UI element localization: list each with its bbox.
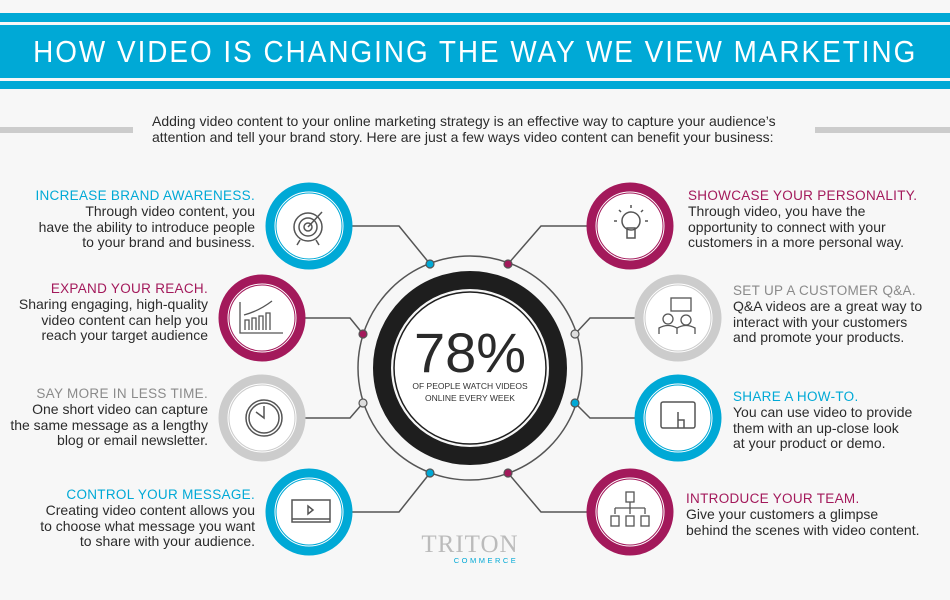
text: team: behind the scenes with video content. bbox=[686, 522, 920, 538]
text: control message: CONTROL YOUR MESSAGE. bbox=[66, 487, 255, 502]
text: increase brand awareness: have the ability to introduce people bbox=[39, 218, 255, 234]
text: showcase personality: SHOWCASE YOUR PERSONALITY. bbox=[688, 188, 917, 203]
text: how-to bbox=[733, 389, 912, 451]
logo: COMMERCE bbox=[454, 556, 518, 565]
text: team: Give your customers a glimpse bbox=[686, 506, 878, 522]
text: control message bbox=[40, 487, 255, 549]
text: increase brand awareness: Through video content, you bbox=[85, 203, 255, 219]
text: showcase personality: customers in a more personal way. bbox=[688, 234, 904, 250]
title banner bbox=[0, 25, 950, 78]
text: Q&A: interact with your customers bbox=[733, 314, 907, 330]
text: control message: to share with your audience. bbox=[80, 533, 255, 549]
text: expand reach: Sharing engaging, high-quality bbox=[19, 296, 208, 312]
text: how-to: SHARE A HOW-TO. bbox=[733, 389, 859, 404]
title banner: HOW VIDEO IS CHANGING THE WAY WE VIEW MARKETING bbox=[33, 34, 917, 69]
text: showcase personality: opportunity to connect with your bbox=[688, 218, 886, 234]
text: how-to: at your product or demo. bbox=[733, 435, 886, 451]
text: control message: to choose what message you want bbox=[40, 518, 255, 534]
text: expand reach: EXPAND YOUR REACH. bbox=[51, 281, 208, 296]
text: increase brand awareness: INCREASE BRAND AWARENESS. bbox=[35, 188, 255, 203]
text: expand reach bbox=[19, 281, 208, 343]
text: how-to: them with an up-close look bbox=[733, 420, 899, 436]
intro text: attention and tell your brand story. Here are just a few ways video content can benefit your business: bbox=[152, 129, 774, 145]
text: increase brand awareness: to your brand and business. bbox=[82, 234, 255, 250]
text: how-to: You can use video to provide bbox=[733, 404, 912, 420]
intro text: Adding video content to your online marketing strategy is an effective way to capture your audience’s bbox=[152, 113, 776, 129]
text: showcase personality bbox=[688, 188, 917, 250]
text: say more: One short video can capture bbox=[32, 401, 208, 417]
center stat: 78% bbox=[414, 321, 526, 384]
text: Q&A: SET UP A CUSTOMER Q&A. bbox=[733, 283, 916, 298]
text: team: INTRODUCE YOUR TEAM. bbox=[686, 491, 860, 506]
center stat: OF PEOPLE WATCH VIDEOS bbox=[412, 381, 528, 391]
text: Q&A: and promote your products. bbox=[733, 329, 904, 345]
center stat: ONLINE EVERY WEEK bbox=[425, 393, 515, 403]
intro text bbox=[152, 113, 776, 145]
logo: TRITON bbox=[421, 531, 519, 558]
text: Q&A bbox=[733, 283, 922, 345]
text: say more: the same message as a lengthy bbox=[10, 416, 208, 432]
text: increase brand awareness bbox=[35, 188, 255, 250]
text: team bbox=[686, 491, 920, 538]
text: say more bbox=[10, 386, 208, 448]
text: say more: SAY MORE IN LESS TIME. bbox=[36, 386, 208, 401]
text: control message: Creating video content allows you bbox=[46, 502, 255, 518]
text: say more: blog or email newsletter. bbox=[57, 432, 208, 448]
header bar top bbox=[0, 13, 950, 22]
icon circles bbox=[223, 187, 717, 551]
text: expand reach: reach your target audience bbox=[41, 327, 208, 343]
center stat bbox=[382, 280, 558, 456]
text: Q&A: Q&A videos are a great way to bbox=[733, 298, 922, 314]
text: expand reach: video content can help you bbox=[41, 312, 208, 328]
text: showcase personality: Through video, you have the bbox=[688, 203, 865, 219]
